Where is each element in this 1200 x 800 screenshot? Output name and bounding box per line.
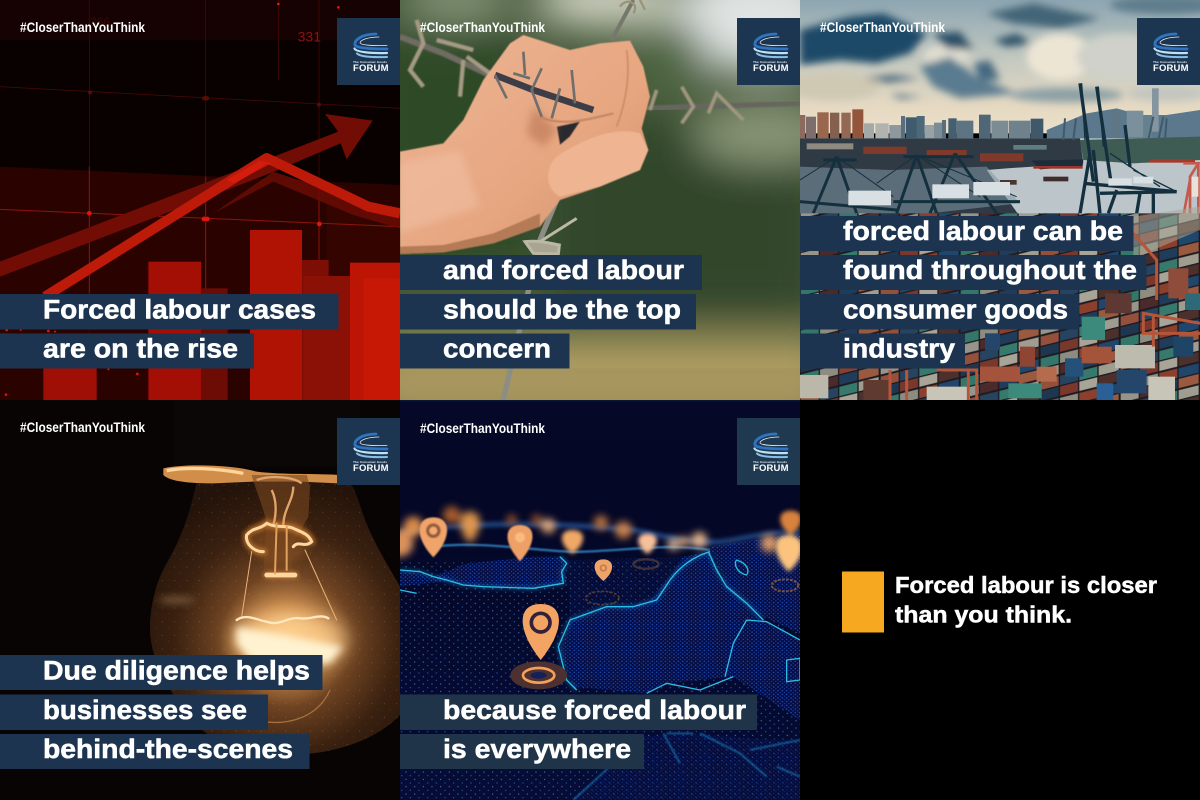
logo: [737, 18, 800, 85]
caption: are on the rise: [43, 334, 238, 364]
caption: behind-the-scenes: [43, 734, 293, 764]
caption: Due diligence helps: [43, 656, 310, 686]
caption: forced labour can be: [843, 216, 1123, 246]
image: digital dotted world map with pins: [387, 400, 802, 800]
logo: The Consumer Goods: [1153, 60, 1188, 64]
panel: forced labour cases are on the rise: [0, 0, 400, 400]
logo: [337, 18, 400, 85]
caption: [0, 655, 322, 769]
collar: [163, 465, 338, 483]
gantry boxes: [848, 177, 1153, 205]
caption: should be the top: [443, 294, 681, 324]
caption: industry: [843, 334, 955, 364]
panel: forced labour can be found throughout the consumer goods industry: [787, 0, 1200, 400]
logo: FORUM: [753, 463, 789, 474]
panel: because forced labour is everywhere: [387, 400, 802, 800]
caption: businesses see: [43, 695, 247, 725]
hashtag: #CloserThanYouThink: [420, 19, 545, 35]
panel: closing message: [800, 400, 1200, 800]
hashtag: #CloserThanYouThink: [420, 420, 545, 436]
logo: FORUM: [1153, 63, 1189, 74]
coastlines: [400, 552, 763, 690]
closing text: Forced labour is closer: [895, 572, 1157, 598]
harbour: [800, 138, 1200, 218]
wire behind: [612, 0, 633, 40]
caption: is everywhere: [443, 734, 631, 764]
logo: FORUM: [353, 463, 389, 474]
blurred pins: [387, 506, 778, 557]
logo: [1137, 18, 1200, 85]
clouds: [787, 0, 1200, 102]
caption: [800, 216, 1146, 368]
logo: The Consumer Goods: [353, 460, 388, 464]
container yard: [800, 213, 1200, 400]
hand: [400, 35, 650, 254]
caption: found throughout the: [843, 255, 1137, 285]
axis label: 331: [298, 29, 321, 45]
cranes: [800, 83, 1177, 233]
closing text: than you think.: [895, 602, 1072, 628]
panel: forced labour should be the top concern: [367, 0, 847, 423]
caption: [0, 294, 338, 368]
caption: and forced labour: [443, 255, 685, 285]
caption: concern: [443, 334, 551, 364]
logo: [337, 418, 400, 485]
logo: The Consumer Goods: [353, 60, 388, 64]
orange accent block: [842, 572, 884, 632]
panel: due diligence helps businesses see behind-the-scenes: [0, 400, 400, 800]
filament: [246, 523, 312, 575]
red tower: [1183, 163, 1198, 220]
hashtag: #CloserThanYouThink: [820, 19, 945, 35]
bright arrow line: [45, 158, 400, 297]
main pin: [510, 661, 567, 689]
land masses: [400, 557, 567, 588]
image: red rising chart: [0, 0, 400, 400]
caption: consumer goods: [843, 294, 1068, 324]
logo: The Consumer Goods: [753, 460, 788, 464]
stem: [252, 475, 310, 573]
closing text: [895, 572, 1157, 628]
image: container port under cloudy sky: [787, 0, 1200, 400]
image: red rising chart: 366: [90, 15, 110, 29]
logo: FORUM: [753, 63, 789, 74]
caption: Forced labour cases: [43, 294, 316, 324]
caption: because forced labour: [443, 695, 747, 725]
logo: The Consumer Goods: [753, 60, 788, 64]
bars: [43, 367, 97, 400]
wire front: [495, 75, 593, 110]
skyline: [1046, 108, 1200, 138]
logo: FORUM: [353, 63, 389, 74]
faint arrow: [0, 114, 373, 277]
caption: [400, 694, 757, 769]
logo: [737, 418, 800, 485]
hashtag: #CloserThanYouThink: [20, 19, 145, 35]
caption: [400, 255, 702, 368]
hashtag: #CloserThanYouThink: [20, 419, 145, 435]
image: hand gripping barbed wire: [400, 0, 800, 400]
image: glowing light bulb: [150, 400, 400, 754]
